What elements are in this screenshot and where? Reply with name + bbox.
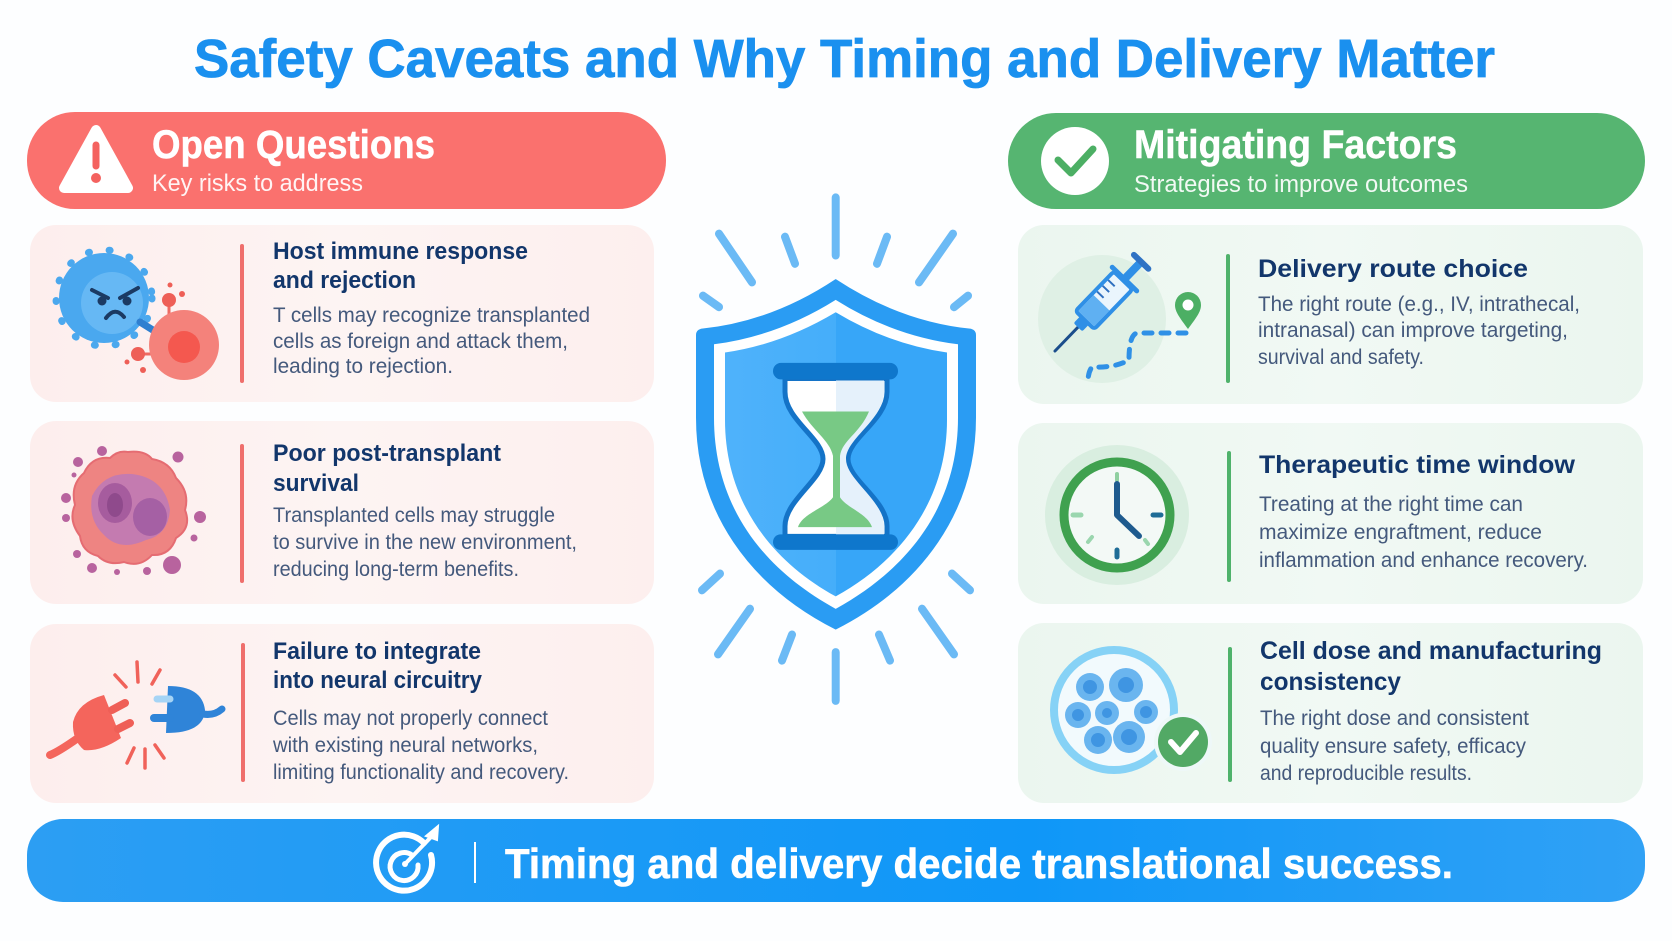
card text: quality ensure safety, efficacy [1260, 735, 1526, 758]
card text [1258, 255, 1580, 369]
icon: immune cell attacking [56, 250, 219, 380]
card text: with existing neural networks, [272, 734, 538, 757]
card text: Poor post-transplant [273, 440, 501, 467]
subheading: key risks: Key risks to address [152, 170, 363, 197]
card: delivery route choice [1018, 225, 1643, 404]
card text: limiting functionality and recovery. [273, 761, 569, 784]
card text: reducing long-term benefits. [273, 558, 519, 581]
icon: check circle [1041, 127, 1109, 195]
card text: and rejection [273, 267, 416, 294]
icon: cell dish with check [1054, 650, 1212, 771]
panel: open questions header [27, 112, 666, 209]
card text: into neural circuitry [273, 667, 483, 694]
icon: target with arrow [376, 826, 438, 891]
divider [1227, 451, 1231, 582]
divider [240, 444, 244, 583]
divider [474, 842, 476, 883]
icon: shield with hourglass [697, 198, 975, 701]
card text: T cells may recognize transplanted [273, 304, 590, 327]
shield [697, 280, 975, 628]
banner: takeaway [27, 819, 1645, 902]
icon: syringe and route pin [1038, 250, 1201, 383]
icon: dying cell [61, 446, 206, 575]
hourglass [773, 363, 898, 550]
card text: and reproducible results. [1260, 762, 1472, 785]
card text: leading to rejection. [273, 355, 453, 378]
card: poor survival [30, 421, 654, 604]
card text [273, 238, 590, 378]
card text: Host immune response [273, 238, 528, 265]
title: Safety Caveats and Why Timing and Delivery Matter [194, 29, 1495, 89]
divider [1226, 254, 1230, 383]
icon: clock [1045, 445, 1189, 585]
card text: survival [273, 470, 359, 497]
card text: Cells may not properly connect [273, 707, 548, 730]
card text: The right route (e.g., IV, intrathecal, [1258, 293, 1580, 316]
card text [273, 440, 577, 581]
card: therapeutic time window [1018, 423, 1643, 604]
card text: Transplanted cells may struggle [273, 504, 555, 527]
card text: Delivery route choice [1258, 255, 1528, 283]
divider [240, 244, 244, 383]
divider [241, 643, 245, 782]
card text: consistency [1260, 668, 1401, 696]
card text [272, 638, 569, 784]
takeaway text: Timing and delivery decide translational success. [505, 840, 1453, 887]
rays [702, 198, 970, 701]
card text [1259, 451, 1588, 572]
card text: maximize engraftment, reduce [1259, 521, 1542, 544]
icon: warning triangle [64, 130, 128, 188]
heading: mitigating factors: Mitigating Factors [1134, 123, 1457, 167]
card text [1260, 637, 1602, 785]
card text: survival and safety. [1258, 346, 1424, 369]
card: host immune response [30, 225, 654, 402]
divider [1228, 647, 1232, 782]
card text: Cell dose and manufacturing [1260, 637, 1602, 665]
subheading: strategies: Strategies to improve outcomes [1134, 171, 1468, 198]
panel: mitigating factors header [1008, 113, 1645, 209]
card text: intranasal) can improve targeting, [1258, 319, 1568, 342]
card text: Treating at the right time can [1259, 493, 1523, 516]
card text: Failure to integrate [273, 638, 481, 665]
card text: to survive in the new environment, [273, 531, 577, 554]
card text: Therapeutic time window [1259, 451, 1576, 479]
card text: cells as foreign and attack them, [273, 330, 568, 353]
card: cell dose and manufacturing [1018, 623, 1643, 803]
heading: open questions: Open Questions [152, 123, 435, 167]
card text: The right dose and consistent [1260, 707, 1529, 730]
icon: unplugged connector [50, 662, 222, 768]
card text: inflammation and enhance recovery. [1259, 549, 1588, 572]
card: failure to integrate [30, 624, 654, 803]
